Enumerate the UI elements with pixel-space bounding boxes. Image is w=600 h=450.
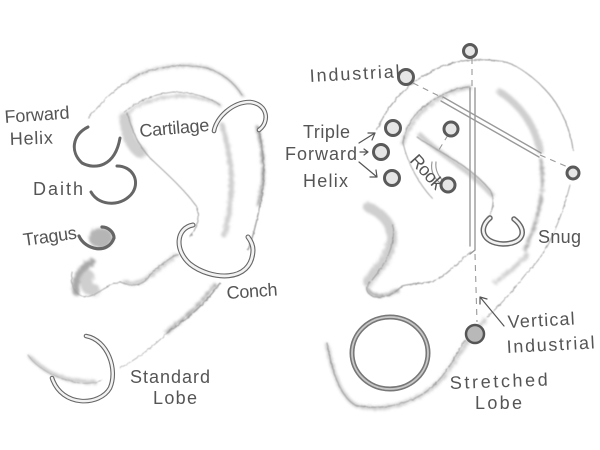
- label: vertical industrial: Industrial: [506, 332, 595, 357]
- arrows: triple forward helix: [359, 133, 377, 177]
- barbell: industrial: [398, 70, 579, 179]
- label: vertical industrial: Vertical: [507, 309, 575, 332]
- label: triple forward helix: Helix: [303, 171, 348, 191]
- rook piercing: [432, 122, 458, 192]
- label: stretched lobe: Lobe: [475, 393, 522, 413]
- right ear drawing: [327, 60, 573, 408]
- label: triple forward helix: [285, 122, 357, 191]
- ring: tragus: [79, 227, 114, 249]
- ring: daith: [91, 166, 136, 203]
- label: rook: Rook: [406, 150, 448, 194]
- label: standard lobe: [130, 367, 210, 408]
- label: cartilage: Cartilage: [139, 115, 210, 141]
- label: daith: Daith: [33, 179, 83, 199]
- label: conch: Conch: [226, 279, 278, 303]
- label: standard lobe: Standard: [130, 367, 210, 387]
- arrow: vertical industrial: [480, 297, 504, 326]
- label: vertical industrial: [506, 309, 595, 357]
- label: tragus: Tragus: [22, 223, 78, 250]
- label: snug: Snug: [538, 227, 581, 247]
- ring: standard lobe: [52, 336, 113, 401]
- label: standard lobe: Lobe: [153, 388, 197, 408]
- ring: forward helix: [74, 127, 120, 166]
- ring: snug: [483, 218, 522, 244]
- label: forward helix (left): [4, 103, 70, 149]
- label: forward helix (left): Forward: [4, 103, 70, 127]
- barbell: vertical industrial: [464, 44, 484, 343]
- label: industrial: Industrial: [309, 61, 400, 86]
- label: forward helix (left): Helix: [9, 128, 53, 149]
- label: triple forward helix: Forward: [285, 144, 357, 164]
- ring: conch: [179, 225, 253, 276]
- label: stretched lobe: Stretched: [449, 370, 548, 393]
- label: stretched lobe: [449, 370, 548, 413]
- left ear drawing: [28, 66, 264, 383]
- label: triple forward helix: Triple: [303, 122, 350, 142]
- ring: cartilage: [214, 102, 266, 131]
- ring: stretched lobe: [352, 317, 428, 389]
- studs: triple forward helix: [374, 120, 400, 186]
